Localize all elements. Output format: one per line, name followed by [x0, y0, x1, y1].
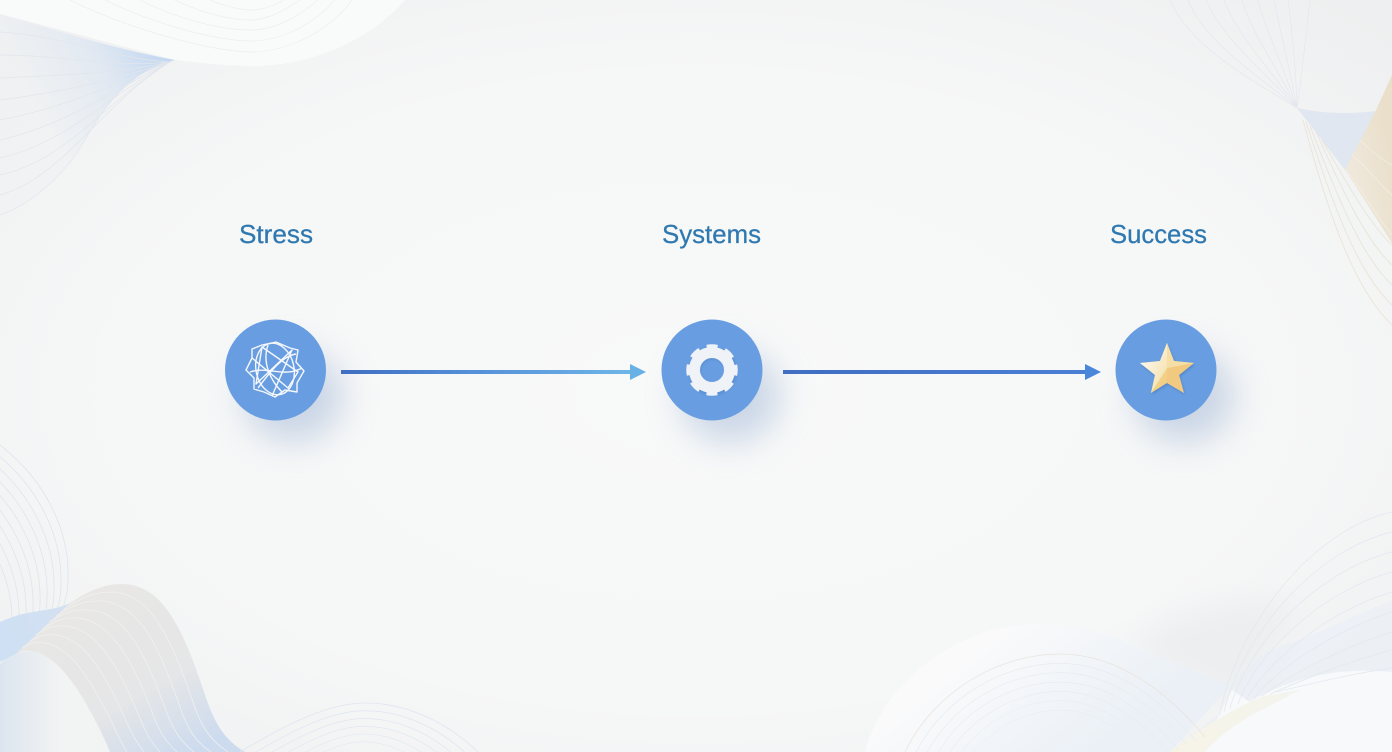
- icon: gold star: [1140, 343, 1195, 394]
- step: Systems: [662, 219, 780, 442]
- decoration: bottom wave lines: [240, 703, 478, 752]
- node: success circle: [1116, 320, 1234, 442]
- icon: tangled wire ball: [246, 340, 304, 398]
- decoration: top right ribbon: [1170, 0, 1392, 325]
- step: Stress: [225, 219, 343, 442]
- decoration: bottom left ribbon: [0, 584, 245, 752]
- decoration: left arcs: [0, 445, 68, 658]
- decoration: top left ribbon: [0, 0, 405, 215]
- node: stress circle: [225, 320, 343, 442]
- heading: Systems: Systems: [662, 219, 761, 249]
- heading: Stress: Stress: [239, 219, 313, 249]
- decoration: bottom right ribbons: [865, 512, 1392, 752]
- heading: Success: Success: [1110, 219, 1207, 249]
- step: Success: [1110, 219, 1234, 442]
- arrow: systems to success: [783, 364, 1101, 380]
- arrow: stress to systems: [341, 364, 646, 380]
- node: systems circle: [662, 320, 780, 442]
- icon: gear: [689, 347, 735, 393]
